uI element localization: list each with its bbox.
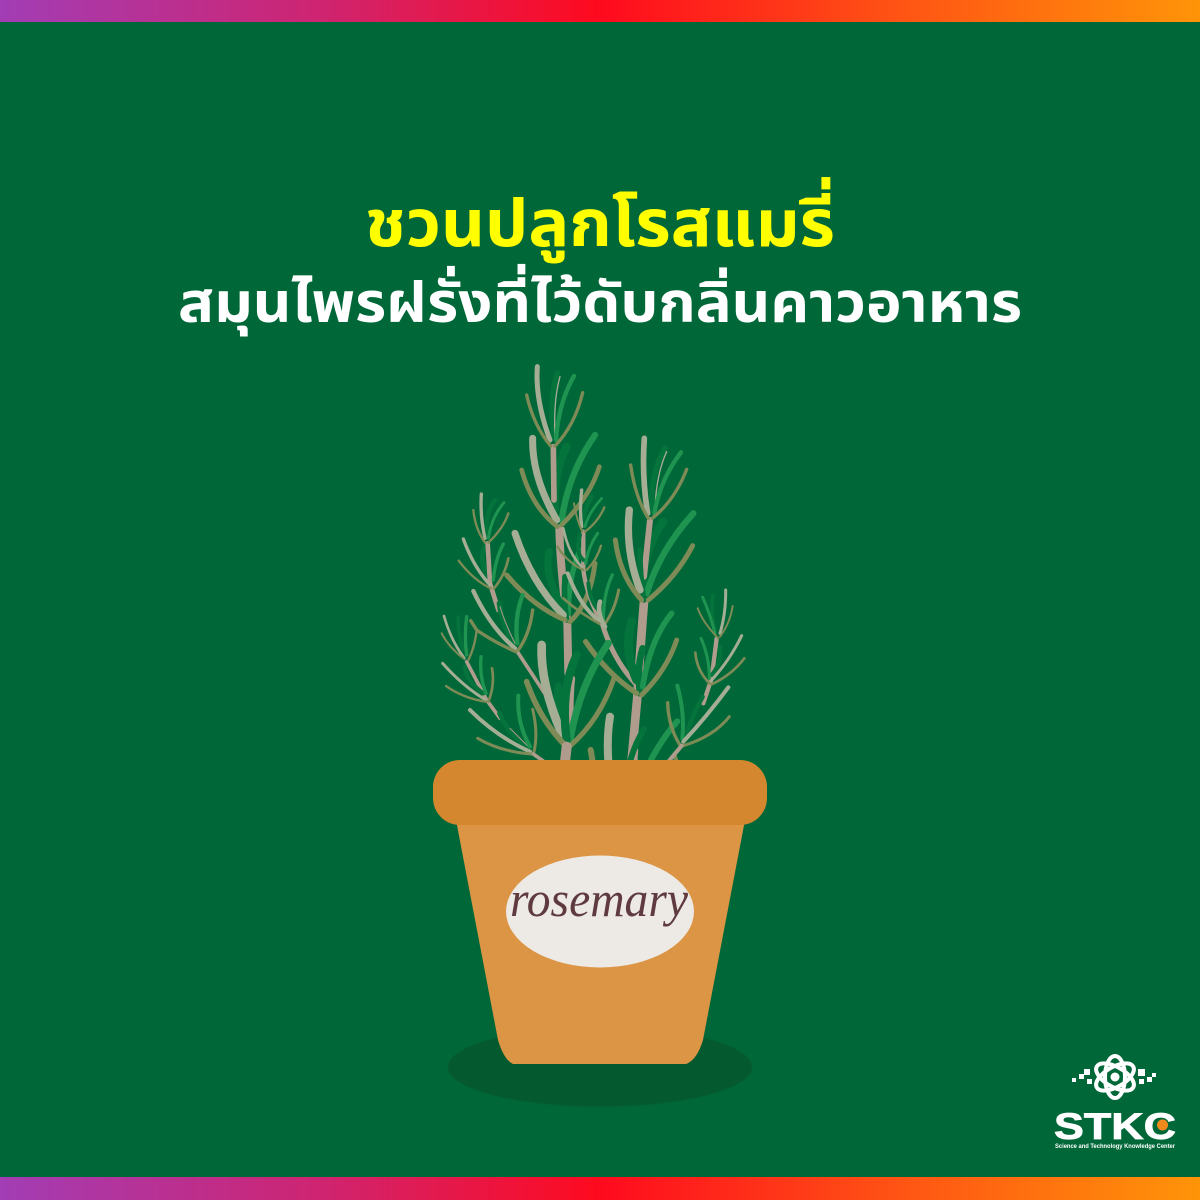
pot body [456,820,745,1064]
pot [433,760,767,1064]
branch: bottom shoots [591,717,677,762]
branch: left upper [459,494,533,652]
pot rim [433,760,767,825]
title: ชวนปลูกโรสแมรี่ [365,177,835,263]
branch: small upper twig [557,490,637,685]
branch: right tall [615,438,693,760]
branch: lower centre [517,643,614,762]
branch: right middle [586,613,677,695]
branch: far right [668,590,744,762]
top gradient bar [0,0,1200,22]
logo tagline: Science and Technology Knowledge Center [1055,1144,1176,1150]
bottom gradient bar [0,1177,1200,1200]
label text: rosemary [510,871,689,927]
branch: centre middle [507,533,595,622]
title: สมุนไพรฝรั่งที่ไว้ดับกลิ่นคาวอาหาร [178,263,1022,337]
icon: pixel squares [1072,1069,1156,1084]
title [178,177,1022,337]
logo orange dot [1157,1120,1168,1130]
branch: left lower [442,616,544,762]
STKC logo [1054,1056,1176,1150]
label [506,856,694,968]
rosemary plant [442,367,744,762]
icon: atom [1092,1056,1138,1098]
pot shadow [448,1028,752,1106]
logo wordmark: STKC [1054,1106,1176,1147]
branch: top centre [522,367,599,673]
